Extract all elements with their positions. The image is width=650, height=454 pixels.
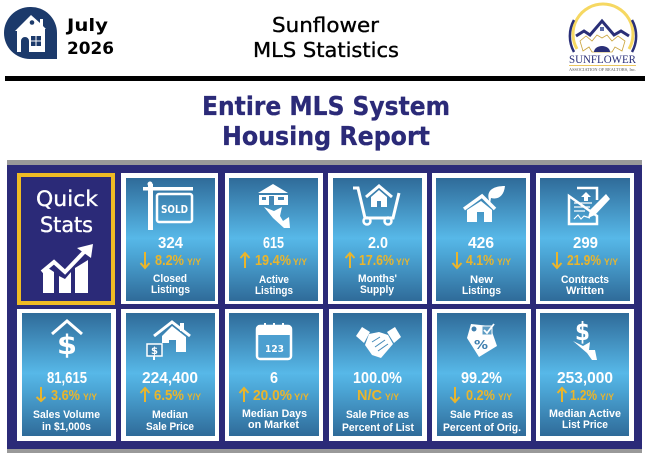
card: active listings: 19.4%	[255, 252, 291, 269]
card: quick stats: Quick	[36, 187, 99, 211]
header title	[253, 13, 399, 62]
card: sale price as percent of original: Y/Y	[498, 392, 512, 402]
card: active listings: 615	[263, 235, 284, 252]
card: months' supply: Y/Y	[396, 257, 410, 267]
logo: Sunflower Association of Realtors: SUNFLOWER	[569, 54, 636, 66]
card: closed listings: Closed	[153, 273, 187, 285]
date	[66, 16, 114, 59]
logo: Sunflower Association of Realtors	[569, 4, 636, 73]
icon: house badge	[4, 7, 57, 59]
main title: Housing Report	[222, 122, 430, 152]
card: sale price as percent of list: N/C	[357, 387, 382, 404]
card: median active list price	[536, 309, 634, 441]
icon: cart with house	[353, 186, 399, 224]
logo: Sunflower Association of Realtors: ASSOCIATION OF REALTORS, Inc.	[569, 67, 636, 73]
card: median active list price: Median Active	[549, 408, 621, 420]
card: active listings	[225, 173, 323, 304]
card: median active list price: Y/Y	[600, 392, 614, 402]
card: closed listings: 8.2%	[155, 252, 184, 269]
icon: percent tag: %	[474, 338, 488, 352]
card: quick stats: Stats	[40, 213, 93, 237]
card: new listings: Listings	[462, 285, 501, 297]
card: median sale price: 6.5%	[154, 387, 184, 404]
main title	[202, 92, 450, 152]
icon: house in hand	[258, 184, 290, 228]
card: median sale price: 224,400	[142, 370, 198, 387]
card: months' supply: Supply	[360, 284, 395, 296]
card: sale price as percent of list: 100.0%	[353, 370, 402, 387]
card: new listings	[432, 173, 530, 304]
card: median sale price: Y/Y	[187, 392, 201, 402]
card: sale price as percent of original: 0.2%	[466, 387, 495, 404]
card: new listings: Y/Y	[497, 257, 511, 267]
card: months' supply: 17.6%	[359, 252, 394, 269]
card: sale price as percent of original: Percent of Orig.	[443, 422, 521, 434]
card: closed listings: Listings	[151, 284, 190, 296]
card: median sale price	[121, 309, 219, 441]
header title: MLS Statistics	[253, 38, 399, 62]
card: sale price as percent of original	[432, 309, 531, 441]
card: median days on market: Median Days	[242, 408, 307, 420]
card: median active list price: List Price	[562, 419, 608, 431]
card: contracts written: 21.9%	[567, 252, 601, 269]
card: median days on market: 6	[270, 370, 278, 387]
icon: dollar over hand: $	[575, 317, 590, 346]
icon: calendar: 123	[265, 344, 284, 355]
icon: contract and pen	[569, 188, 610, 224]
icon: dollar under roof: $	[57, 330, 77, 361]
card: closed listings	[121, 173, 218, 304]
card: sales volume: Sales Volume	[33, 409, 100, 421]
icon: sold sign: SOLD	[161, 203, 188, 216]
card: sale price as percent of list: Sale Price as	[346, 409, 409, 421]
card: closed listings: 324	[158, 235, 183, 252]
card: active listings: Active	[259, 274, 289, 286]
card: sales volume: 3.6%	[51, 387, 80, 404]
card: sales volume: 81,615	[47, 370, 87, 387]
icon: house with leaf	[464, 186, 505, 222]
panel: quick stats grid	[7, 160, 642, 453]
card: contracts written: 299	[573, 235, 598, 252]
card: median days on market: on Market	[248, 419, 299, 431]
card: closed listings: Y/Y	[187, 257, 201, 267]
card: active listings: Y/Y	[293, 257, 307, 267]
card: contracts written: Written	[566, 285, 604, 297]
card: new listings: 4.1%	[466, 252, 494, 269]
card: median days on market	[225, 309, 323, 441]
card: sale price as percent of list	[329, 309, 427, 441]
card: months' supply	[328, 173, 427, 304]
card: sales volume	[17, 309, 116, 441]
card: median active list price: 253,000	[557, 370, 613, 387]
header title: Sunflower	[272, 13, 380, 37]
card: active listings: Listings	[255, 285, 293, 297]
date: July	[66, 16, 108, 36]
card: median sale price: Sale Price	[146, 421, 194, 433]
card: new listings: New	[470, 274, 493, 286]
card: new listings: 426	[468, 235, 494, 252]
card: sale price as percent of list: Y/Y	[385, 392, 399, 402]
date: 2026	[67, 39, 114, 59]
card: median sale price: Median	[152, 409, 188, 421]
card: median active list price: 1.2%	[570, 387, 597, 404]
card: contracts written: Contracts	[561, 274, 609, 286]
card: quick stats	[19, 175, 113, 303]
card: median days on market: Y/Y	[294, 392, 309, 402]
card: contracts written	[536, 173, 634, 304]
icon: house with price sign: $	[151, 346, 158, 357]
card: sale price as percent of list: Percent of List	[342, 422, 414, 434]
card: contracts written: Y/Y	[604, 257, 618, 267]
card: sales volume: in $1,000s	[42, 421, 91, 433]
card: sales volume: Y/Y	[83, 392, 97, 402]
card: median days on market: 20.0%	[253, 387, 292, 404]
icon: handshake	[356, 327, 401, 358]
main title: Entire MLS System	[202, 92, 450, 122]
card: months' supply: Months'	[358, 273, 397, 285]
card: months' supply: 2.0	[368, 235, 388, 252]
card: sale price as percent of original: Sale Price as	[450, 409, 513, 421]
card: sale price as percent of original: 99.2%	[461, 370, 502, 387]
